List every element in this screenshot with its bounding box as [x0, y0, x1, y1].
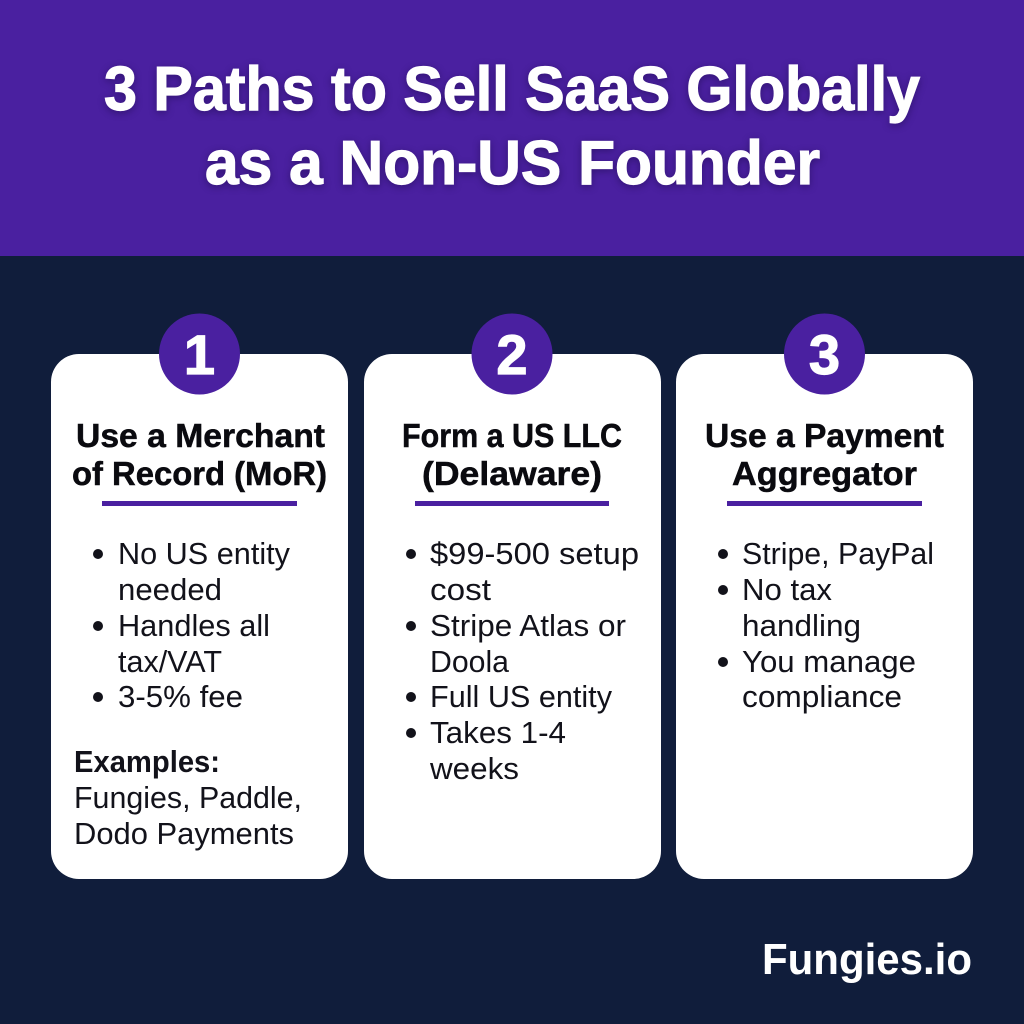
- number badge 3: 3: [809, 323, 840, 386]
- panel: payment aggregator: [676, 314, 973, 879]
- number badge 3: [784, 314, 865, 394]
- number badge 1: 1: [184, 323, 215, 386]
- heading: use a merchant of record: [72, 417, 327, 492]
- heading: use a payment aggregator: Aggregator: [732, 455, 917, 492]
- examples: Examples:: [74, 744, 220, 779]
- title: 3 Paths to Sell SaaS Globally: [104, 55, 920, 124]
- heading: use a payment aggregator: [705, 417, 944, 492]
- bullet list: Doola: [430, 644, 510, 679]
- bullet list: weeks: [429, 751, 519, 786]
- bullet list: [718, 536, 934, 714]
- examples: [74, 744, 302, 851]
- heading: form a US LLC: (Delaware): [422, 455, 602, 492]
- bullet list: Stripe, PayPal: [742, 536, 934, 571]
- bullet list: cost: [430, 572, 491, 607]
- bullet list: 3-5% fee: [118, 679, 243, 714]
- bullet list: Stripe Atlas or: [430, 608, 626, 643]
- bullet list: $99-500 setup: [430, 536, 639, 571]
- heading: use a payment aggregator: Use a Payment: [705, 417, 944, 454]
- bullet list: [93, 536, 290, 714]
- number badge 1: [159, 314, 240, 394]
- number badge 2: 2: [496, 323, 528, 386]
- bullet list: No US entity: [118, 536, 290, 571]
- bullet list: handling: [742, 608, 861, 643]
- title: [104, 55, 920, 198]
- heading underline: [727, 501, 922, 506]
- title: as a Non-US Founder: [205, 129, 820, 198]
- examples: Fungies, Paddle,: [74, 780, 302, 815]
- examples: Dodo Payments: [74, 816, 294, 851]
- bullet list: Full US entity: [430, 679, 612, 714]
- heading: use a merchant of record: Use a Merchant: [76, 417, 325, 454]
- heading: form a US LLC: Form a US LLC: [402, 417, 622, 454]
- bullet list: [406, 536, 639, 786]
- bullet list: compliance: [742, 679, 902, 714]
- bullet list: needed: [118, 572, 222, 607]
- panel: US LLC: [364, 314, 661, 879]
- bullet list: No tax: [742, 572, 832, 607]
- heading: use a merchant of record: of Record (MoR): [72, 455, 327, 492]
- bullet list: tax/VAT: [118, 644, 222, 679]
- bullet list: You manage: [742, 644, 916, 679]
- footer brand: Fungies.io: [762, 935, 972, 984]
- header band: [0, 0, 1024, 256]
- bullet list: Takes 1-4: [430, 715, 566, 750]
- heading underline: [415, 501, 609, 506]
- number badge 2: [472, 314, 552, 394]
- bullet list: Handles all: [118, 608, 270, 643]
- heading: form a US LLC: [402, 417, 622, 492]
- panel: merchant of record: [51, 314, 348, 879]
- heading underline: [102, 501, 297, 506]
